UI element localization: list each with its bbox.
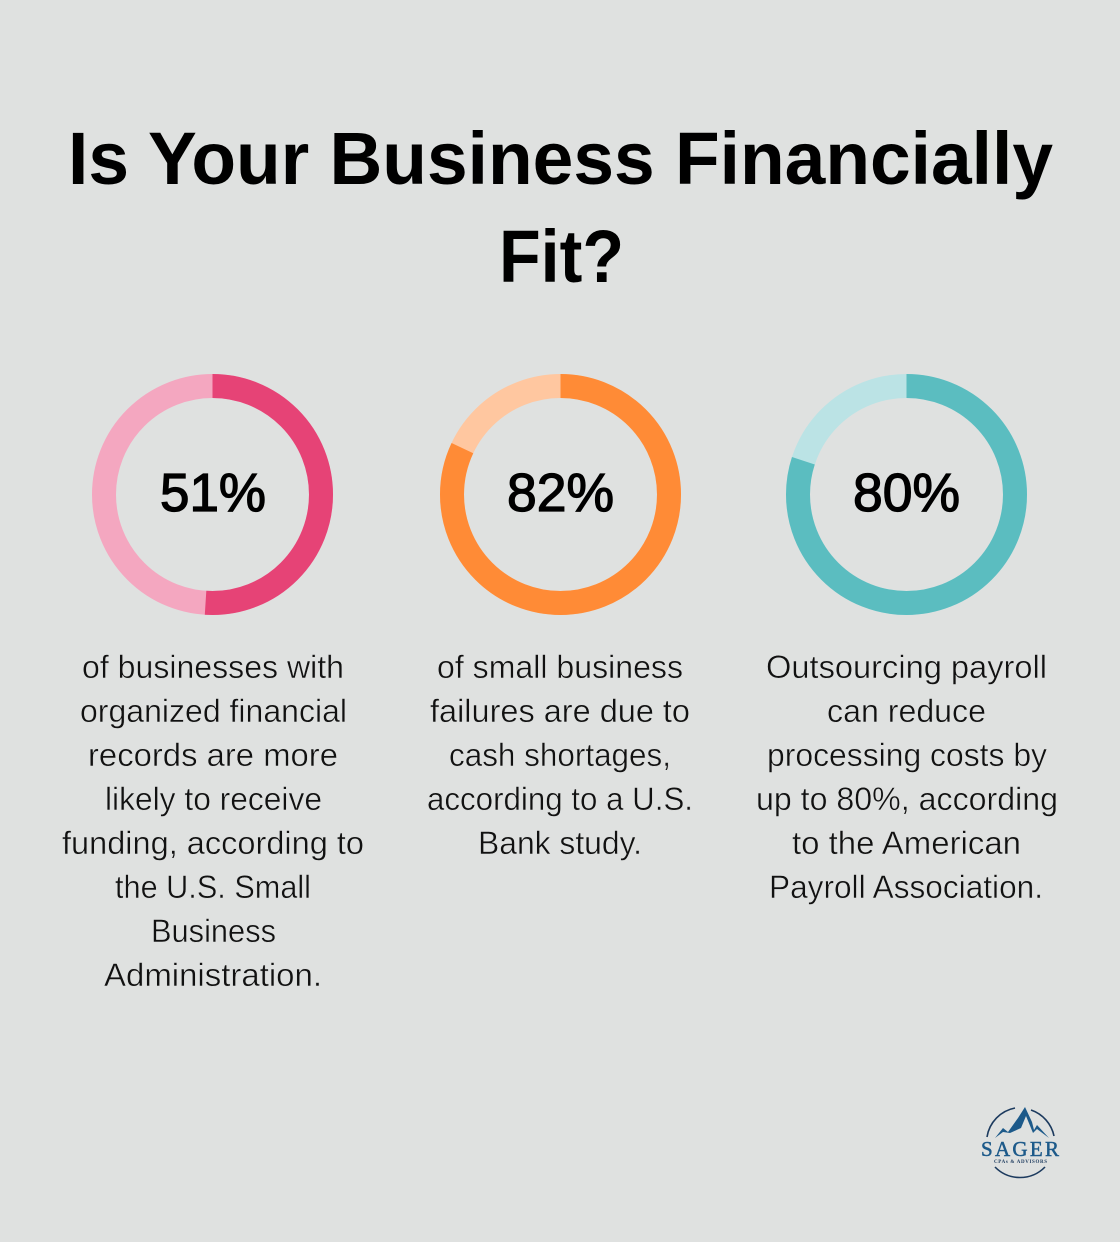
description: 82%: according to a U.S. xyxy=(427,781,693,817)
title: Fit? xyxy=(499,215,624,298)
description: 80%: up to 80%, according xyxy=(756,781,1058,817)
logo tagline: CPAs & ADVISORS xyxy=(994,1160,1047,1165)
description: 51%: Administration. xyxy=(104,957,322,993)
donut chart: 82% xyxy=(452,386,669,603)
donut chart: 80% xyxy=(798,386,1015,603)
description: 80% xyxy=(756,649,1058,905)
description: 51%: of businesses with xyxy=(82,649,344,685)
value: 51%: 51% xyxy=(160,463,266,523)
logo ring arcs xyxy=(987,1108,1054,1178)
logo: Sager CPAs & Advisors xyxy=(981,1107,1059,1178)
description: 82%: of small business xyxy=(437,649,683,685)
description: 82%: failures are due to xyxy=(430,693,690,729)
description: 80%: to the American xyxy=(792,825,1021,861)
panel: 80% statistic xyxy=(756,386,1058,905)
panel: 51% statistic xyxy=(62,386,364,993)
icon: mountain xyxy=(995,1107,1049,1138)
description: 51%: funding, according to xyxy=(62,825,364,861)
description: 51% xyxy=(62,649,364,993)
title xyxy=(68,117,1053,298)
description: 80%: Outsourcing payroll xyxy=(766,649,1047,685)
description: 80%: Payroll Association. xyxy=(769,869,1043,905)
value: 82%: 82% xyxy=(507,463,614,523)
value: 80%: 80% xyxy=(853,463,960,523)
panel: 82% statistic xyxy=(427,386,693,861)
logo wordmark: SAGER xyxy=(981,1137,1059,1161)
description: 51%: organized financial xyxy=(80,693,347,729)
description: 51%: likely to receive xyxy=(105,781,322,817)
description: 80%: can reduce xyxy=(827,693,986,729)
description: 51%: the U.S. Small xyxy=(115,869,311,905)
description: 82%: Bank study. xyxy=(478,825,642,861)
description: 82%: cash shortages, xyxy=(449,737,671,773)
description: 51%: Business xyxy=(151,913,276,949)
description: 80%: processing costs by xyxy=(767,737,1047,773)
description: 51%: records are more xyxy=(88,737,338,773)
title: Is Your Business Financially xyxy=(68,117,1053,200)
donut chart: 51% xyxy=(104,386,321,603)
description: 82% xyxy=(427,649,693,861)
